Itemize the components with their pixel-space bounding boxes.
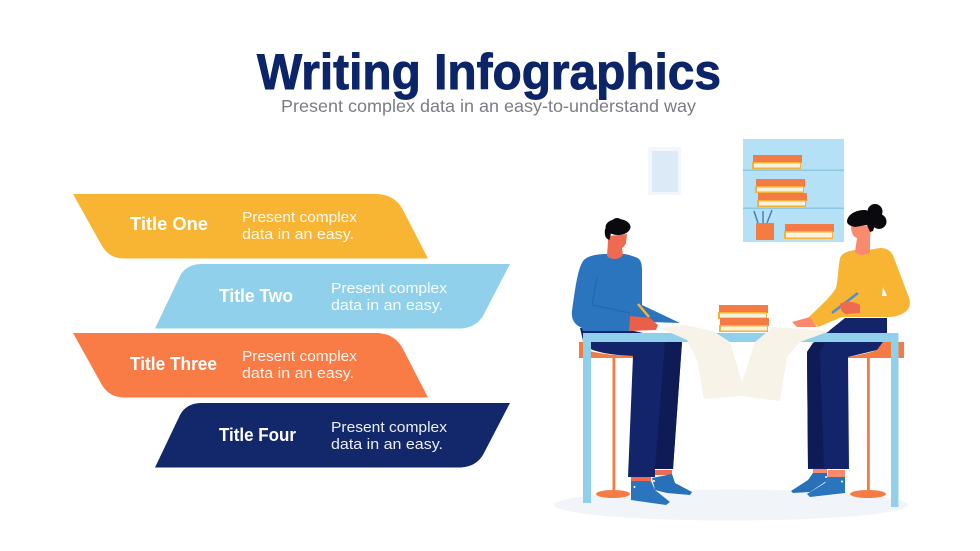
man trousers [580,328,682,477]
subtitle: Present complex data in an easy-to-understand way [281,96,696,116]
man hand [629,316,658,331]
woman figure [791,204,910,497]
panel: title three band: Title Three [130,353,217,374]
woman lower hand [792,317,817,327]
left stool [579,342,634,498]
panel: title one band: data in an easy. [242,227,354,243]
woman pen [832,293,858,313]
table [583,333,898,507]
panel: title four band: Title Four [219,424,296,445]
panel: title two band: Present complex [331,281,448,297]
panel: title four band [155,403,510,468]
man socks [631,470,672,481]
paper sheets [660,325,830,401]
right stool [848,342,904,498]
panel: title two band: data in an easy. [331,298,443,314]
panel: title one band: Present complex [242,210,358,226]
floor shadow [554,490,908,520]
man shoes [631,474,692,505]
panel: title four band: Present complex [331,420,448,436]
panel: title one band [73,194,428,258]
title: Writing Infographics [257,44,721,100]
panel: title three band [73,333,428,398]
man pencil [638,304,649,317]
panel: title one band: Title One [130,213,208,234]
panel: title three band: data in an easy. [242,366,354,382]
panel: title two band: Title Two [219,285,293,306]
man sweater [572,254,680,331]
woman neck and face [851,226,871,255]
panel: title three band: Present complex [242,349,358,365]
bookshelf [743,139,844,242]
woman trousers [807,318,887,469]
panel: title two band [155,264,510,328]
man figure [572,218,692,505]
woman hair [847,204,886,232]
man neck and face [607,234,627,259]
wall picture frame [648,147,681,195]
panel: title four band: data in an easy. [331,437,443,453]
man hair [605,218,630,240]
woman socks [813,469,845,477]
book stack on table [718,305,769,332]
woman upper hand [840,302,860,314]
illustration: writers at a table [554,139,910,520]
woman sweater [809,248,910,327]
woman shoes [791,473,845,497]
